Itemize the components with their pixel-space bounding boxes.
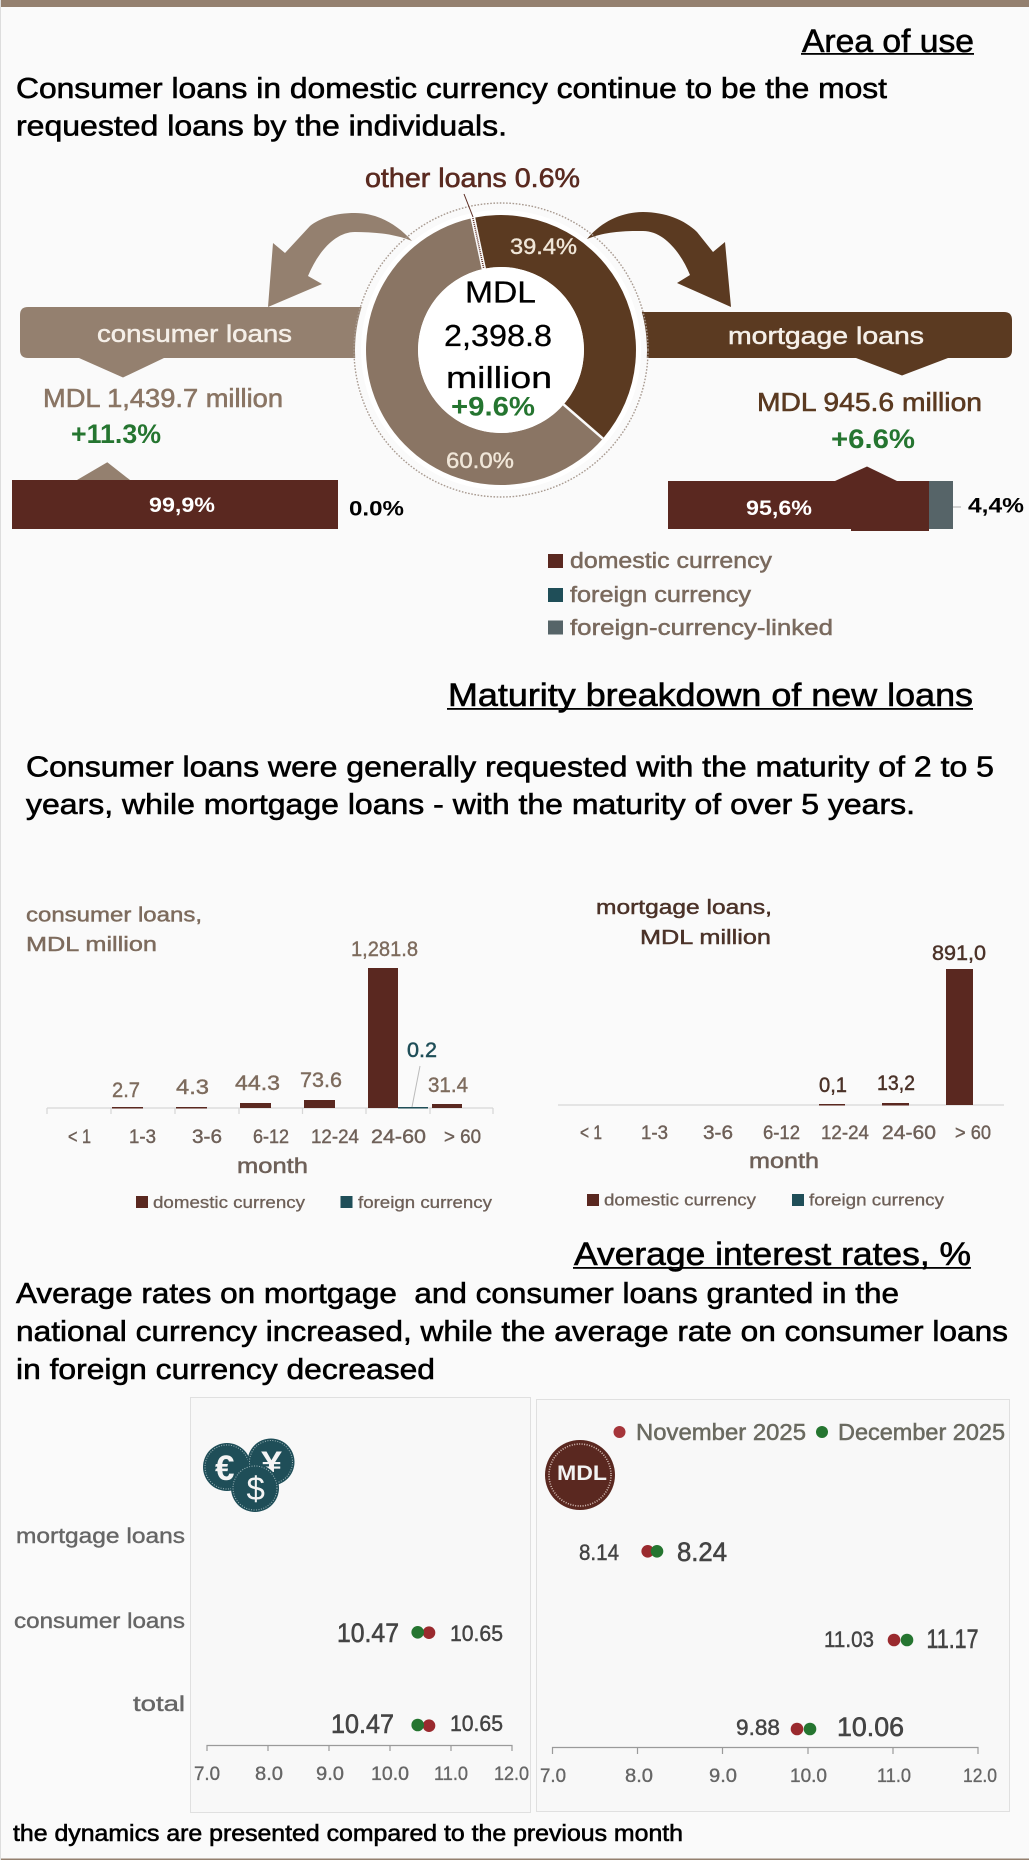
icon: foreign currency coins: € [215, 1449, 234, 1488]
panel: consumer loans band [20, 307, 380, 378]
bar: mortgage loans currency split: 95,6% [746, 497, 812, 520]
icon: foreign currency coins: ¥ [261, 1446, 282, 1479]
donut chart: total loans: MDL [465, 274, 536, 310]
panel: foreign currency interest rates: 8.0 [255, 1764, 283, 1785]
panel: domestic currency interest rates: 8.14 [579, 1540, 619, 1565]
donut chart: total loans: +9.6% [451, 392, 535, 422]
bar chart: consumer loans by maturity: 6-12 [253, 1127, 289, 1148]
text block: interest rate summary: Average rates on mortgage and consumer loans granted in the [16, 1278, 899, 1310]
panel: foreign currency interest rates [190, 1398, 530, 1812]
text block: area of use summary: requested loans by the individuals. [16, 110, 507, 142]
bar chart: consumer loans by maturity: < 1 [68, 1127, 91, 1148]
bar: consumer loans currency split [12, 462, 404, 529]
donut chart: total loans: 2,398.8 [444, 318, 552, 353]
panel: domestic currency interest rates: 12.0 [963, 1766, 997, 1787]
arrow: to mortgage loans [587, 212, 731, 307]
icon: foreign currency coins: $ [246, 1470, 265, 1507]
bar chart: mortgage loans by maturity: 0,1 [819, 1074, 847, 1097]
text block: maturity summary: Consumer loans were generally requested with the maturity of 2 to 5 [26, 752, 994, 784]
donut chart: total loans [354, 194, 648, 497]
text block: area of use summary: Consumer loans in domestic currency continue to be the most [16, 73, 887, 105]
legend: currency types: foreign-currency-linked [570, 615, 833, 640]
row labels: loan types: total [133, 1693, 185, 1716]
panel: domestic currency interest rates: 11.0 [877, 1766, 911, 1787]
text block: area of use summary [16, 73, 887, 142]
bar chart: consumer loans by maturity: 4.3 [176, 1076, 209, 1099]
panel: consumer loans band: consumer loans [97, 321, 292, 348]
bar chart: consumer loans by maturity: 44.3 [235, 1072, 280, 1095]
panel: foreign currency interest rates: 10.47 [337, 1618, 399, 1648]
bar chart: mortgage loans by maturity: 6-12 [763, 1123, 800, 1144]
bar chart: mortgage loans by maturity: mortgage loans, [596, 897, 772, 919]
bar chart: mortgage loans by maturity: 3-6 [703, 1123, 733, 1144]
heading: Area of use: Area of use [802, 23, 974, 59]
heading: Maturity breakdown of new loans: Maturity breakdown of new loans [448, 677, 973, 713]
bar: mortgage loans currency split [668, 466, 1024, 531]
panel: domestic currency interest rates [536, 1400, 1010, 1812]
label: mortgage amount: MDL 945.6 million [757, 387, 982, 417]
donut chart: total loans: 60.0% [446, 448, 514, 473]
panel: domestic currency interest rates: 11.17 [926, 1624, 978, 1654]
bar chart: consumer loans by maturity: 12-24 [311, 1127, 359, 1148]
bar chart: consumer loans by maturity: 24-60 [371, 1127, 426, 1148]
panel: domestic currency interest rates: 9.0 [709, 1766, 737, 1787]
text block: interest rate summary: national currency increased, while the average rate on consumer loans [16, 1316, 1008, 1348]
label: mortgage growth: +6.6% [831, 424, 915, 454]
bar chart: mortgage loans by maturity [558, 897, 1004, 1210]
panel: foreign currency interest rates: 12.0 [494, 1764, 529, 1785]
bar chart: consumer loans by maturity: > 60 [444, 1127, 481, 1148]
text block: interest rate summary: in foreign currency decreased [16, 1354, 435, 1386]
panel: foreign currency interest rates: 11.0 [434, 1764, 468, 1785]
bar chart: mortgage loans by maturity: domestic currency [604, 1190, 757, 1210]
icon: MDL coin: MDL [557, 1462, 607, 1485]
icon: MDL coin [545, 1440, 615, 1510]
panel: foreign currency interest rates: 10.47 [331, 1709, 394, 1739]
panel: domestic currency interest rates: 8.0 [625, 1766, 653, 1787]
bar chart: consumer loans by maturity: 1-3 [129, 1127, 156, 1148]
row labels: loan types [14, 1525, 185, 1716]
bar: consumer loans currency split: 0.0% [349, 498, 404, 520]
panel: foreign currency interest rates: 9.0 [316, 1764, 344, 1785]
panel: foreign currency interest rates: 7.0 [194, 1764, 220, 1785]
donut chart: total loans: million [446, 360, 552, 395]
label: consumer amount: MDL 1,439.7 million [43, 383, 283, 413]
heading: Average interest rates: Average interest rates, % [574, 1236, 971, 1272]
bar chart: mortgage loans by maturity: MDL million [640, 927, 771, 949]
bar chart: consumer loans by maturity: MDL million [26, 934, 157, 956]
panel: domestic currency interest rates: 9.88 [736, 1715, 780, 1740]
legend: currency types: domestic currency [570, 548, 772, 573]
bar chart: consumer loans by maturity: 31.4 [428, 1074, 468, 1097]
bar chart: mortgage loans by maturity: > 60 [955, 1123, 991, 1144]
panel: mortgage loans band [620, 312, 1012, 376]
bar chart: consumer loans by maturity: 73.6 [300, 1069, 342, 1092]
bar chart: mortgage loans by maturity: 1-3 [641, 1123, 668, 1144]
bar chart: consumer loans by maturity: 3-6 [192, 1127, 222, 1148]
row labels: loan types: mortgage loans [16, 1525, 185, 1548]
legend: currency types [548, 548, 833, 640]
panel: mortgage loans band: mortgage loans [728, 323, 924, 350]
bar chart: consumer loans by maturity: domestic currency [153, 1193, 306, 1212]
bar chart: mortgage loans by maturity: foreign currency [809, 1190, 945, 1210]
text block: maturity summary [26, 752, 994, 821]
legend: months [614, 1419, 1005, 1445]
bar chart: consumer loans by maturity [26, 904, 493, 1212]
panel: foreign currency interest rates: 10.0 [371, 1764, 409, 1785]
bar chart: consumer loans by maturity: foreign currency [358, 1193, 493, 1212]
label: other loans: other loans 0.6% [365, 163, 580, 193]
legend: months: November 2025 [636, 1419, 806, 1445]
bar chart: mortgage loans by maturity: < 1 [580, 1123, 602, 1144]
text block: maturity summary: years, while mortgage loans - with the maturity of over 5 years. [26, 789, 915, 821]
label: consumer growth: +11.3% [71, 419, 161, 449]
arrow: to consumer loans [268, 213, 412, 307]
panel: foreign currency interest rates: 10.65 [450, 1711, 503, 1736]
bar chart: consumer loans by maturity: 1,281.8 [351, 938, 418, 961]
donut chart: total loans: 39.4% [510, 234, 577, 259]
bar chart: mortgage loans by maturity: month [749, 1150, 819, 1173]
bar: mortgage loans currency split: 4,4% [968, 494, 1024, 518]
footnote: the dynamics are presented compared to the previous month [13, 1820, 683, 1846]
bar chart: consumer loans by maturity: 2.7 [112, 1079, 140, 1102]
bar chart: mortgage loans by maturity: 12-24 [821, 1123, 869, 1144]
bar chart: consumer loans by maturity: 0.2 [407, 1039, 437, 1062]
legend: months: December 2025 [838, 1419, 1005, 1445]
icon: foreign currency coins [203, 1438, 294, 1512]
legend: currency types: foreign currency [570, 582, 751, 607]
bar chart: mortgage loans by maturity: 13,2 [877, 1072, 915, 1095]
bar: consumer loans currency split: 99,9% [149, 494, 215, 517]
panel: foreign currency interest rates: 10.65 [450, 1621, 503, 1646]
bar chart: mortgage loans by maturity: 24-60 [882, 1123, 936, 1144]
panel: domestic currency interest rates: 7.0 [540, 1766, 566, 1787]
bar chart: consumer loans by maturity: month [237, 1155, 308, 1178]
panel: domestic currency interest rates: 8.24 [677, 1537, 727, 1567]
panel: domestic currency interest rates: 10.0 [790, 1766, 827, 1787]
bar chart: mortgage loans by maturity: 891,0 [932, 942, 986, 965]
bar chart: consumer loans by maturity: consumer loans, [26, 904, 202, 926]
panel: domestic currency interest rates: 11.03 [824, 1627, 874, 1652]
panel: domestic currency interest rates: 10.06 [837, 1712, 904, 1742]
row labels: loan types: consumer loans [14, 1610, 185, 1633]
text block: interest rate summary [16, 1278, 1008, 1386]
